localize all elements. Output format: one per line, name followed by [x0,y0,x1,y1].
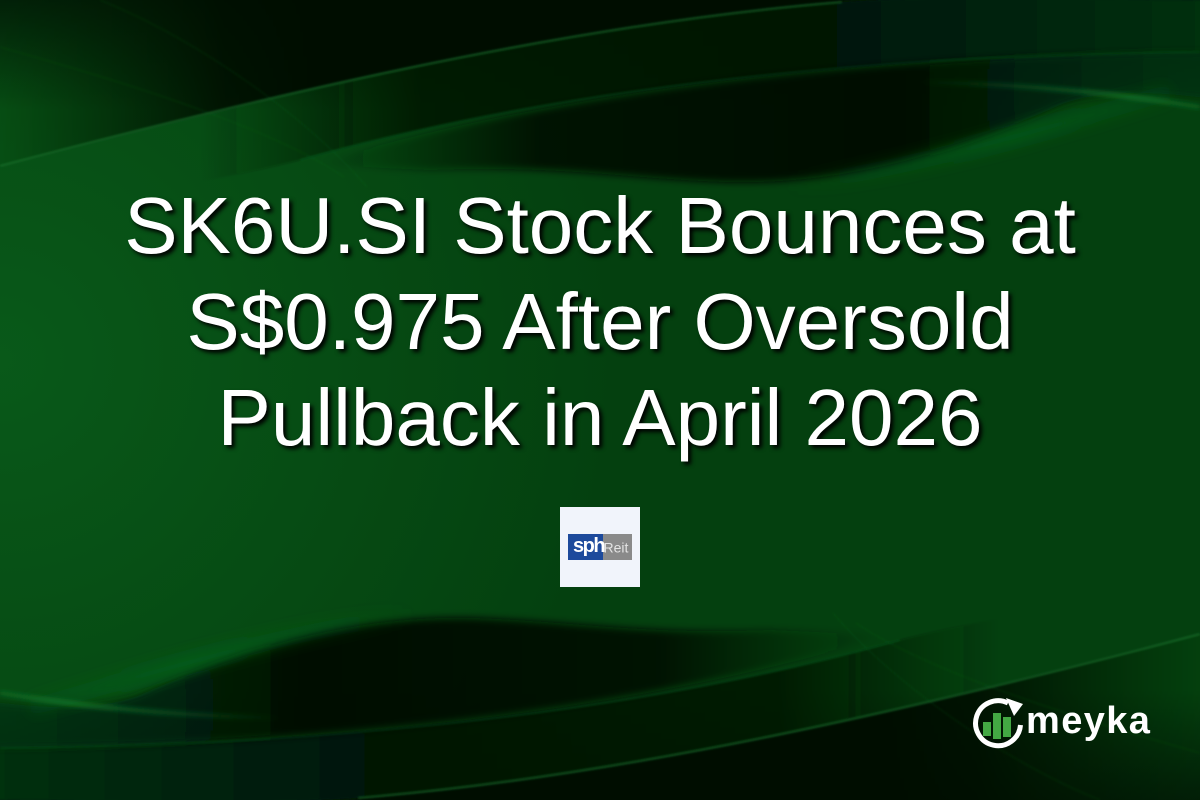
logo: SPH Reit: sph [573,535,604,557]
title: S$0.975 After Oversold [186,277,1014,366]
meyka logo [973,698,1151,748]
wordmark: meyka [1026,700,1151,742]
title: Pullback in April 2026 [218,373,982,462]
logo: SPH Reit: Reit [604,540,629,556]
title: SK6U.SI Stock Bounces at [124,181,1076,270]
logo: SPH Reit [560,507,640,587]
icon: circular arrow with bars [976,698,1023,746]
title [124,181,1080,467]
